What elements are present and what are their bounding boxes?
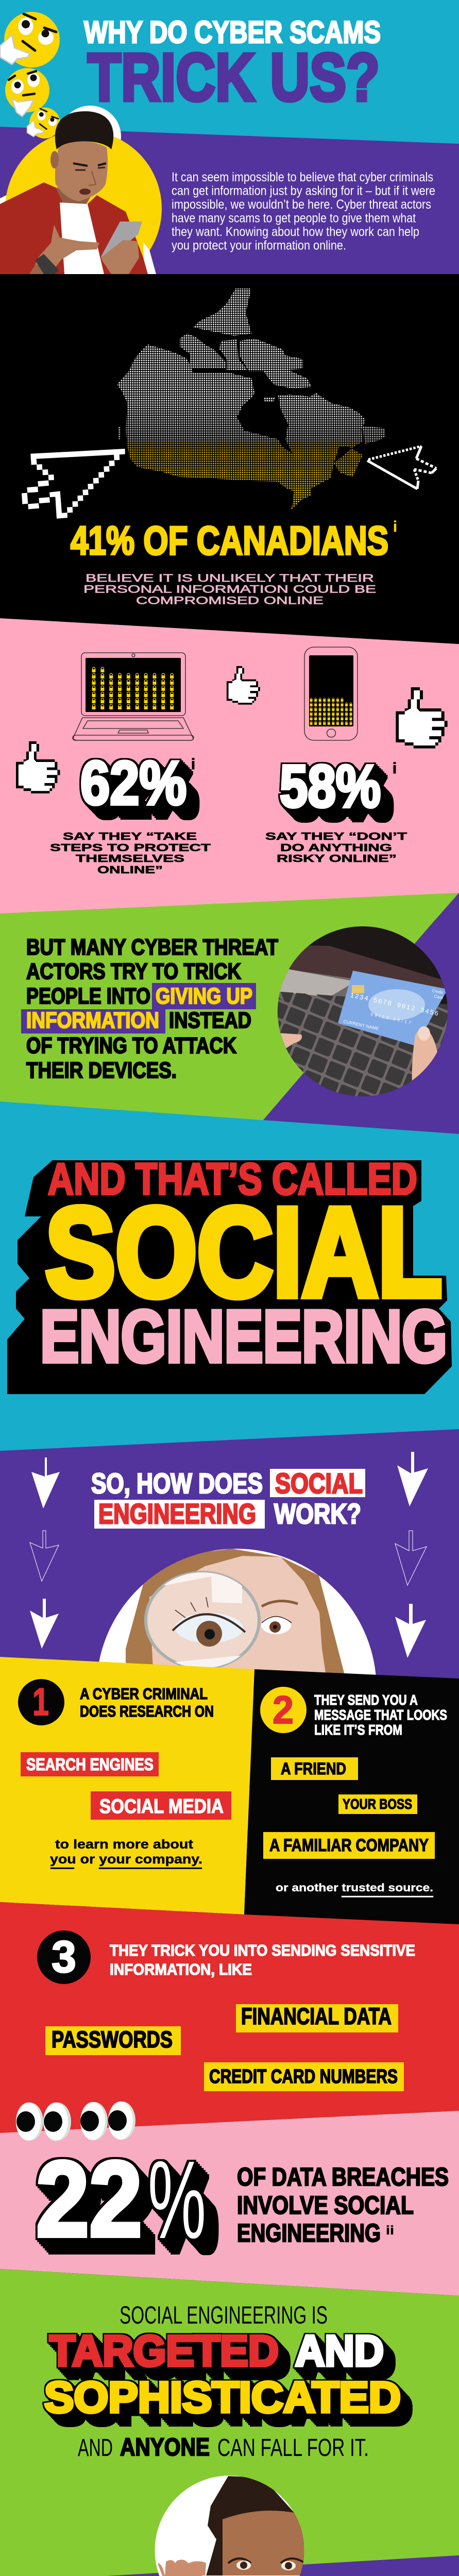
dotted map of Canada bbox=[113, 283, 392, 515]
step 1 heading bbox=[80, 1685, 214, 1720]
title: WHY DO CYBER SCAMS bbox=[84, 15, 381, 49]
text: 62% caption bbox=[50, 831, 211, 876]
photo: woman with magnifying glass bbox=[96, 1549, 377, 1829]
stat: 58%: i bbox=[393, 760, 397, 777]
step 1 badge: 1 bbox=[32, 1680, 49, 1723]
text: but many cyber threat actors: INFORMATION bbox=[26, 1008, 159, 1033]
text: of data breaches bbox=[237, 2163, 449, 2247]
icon: thumbs up left bbox=[16, 741, 60, 793]
heading: so how does social engineering work: SO, HOW DOES bbox=[91, 1467, 263, 1499]
intro paragraph: they want. Knowing about how they work can help bbox=[172, 225, 419, 239]
text: believe it is unlikely: PERSONAL INFORMATION COULD BE bbox=[83, 583, 376, 596]
tag: a friend: A FRIEND bbox=[281, 1759, 346, 1778]
stat: 22%: % bbox=[148, 2138, 206, 2262]
text: 62% caption: THEMSELVES bbox=[76, 853, 184, 865]
text: but many cyber threat actors: ACTORS TRY TO TRICK bbox=[26, 959, 241, 984]
stat: 58%: 58% bbox=[280, 753, 381, 820]
photo: credit card over keyboard: CURRENT NAME bbox=[343, 1019, 379, 1031]
background: green section bbox=[0, 893, 459, 1139]
stat: 22% bbox=[36, 2138, 206, 2262]
photo: credit card over keyboard: Credit bbox=[432, 988, 444, 995]
text: to learn more: to learn more about bbox=[55, 1837, 194, 1852]
step 1 badge bbox=[18, 1679, 64, 1725]
photo: credit card over keyboard: Card bbox=[434, 994, 443, 1001]
emoji: large thinking face bbox=[0, 12, 60, 67]
heading: so how does social engineering work bbox=[91, 1467, 365, 1530]
emoji: medium thinking face bbox=[5, 68, 49, 116]
text: and anyone can fall for it: CAN FALL FOR IT. bbox=[217, 2434, 369, 2462]
panel: green targeted and sophisticated bbox=[0, 2269, 459, 2576]
text: 58% caption: DO ANYTHING bbox=[280, 842, 392, 854]
arrow: left filled top bbox=[31, 1458, 60, 1509]
text: to learn more bbox=[50, 1837, 202, 1869]
step 2 badge: 2 bbox=[273, 1688, 294, 1732]
step 2 badge bbox=[260, 1687, 307, 1733]
tag: a familiar company: A FAMILIAR COMPANY bbox=[269, 1836, 429, 1855]
tag: your boss: YOUR BOSS bbox=[343, 1796, 412, 1812]
panel: step 3 red bbox=[0, 1902, 459, 2133]
text: and anyone can fall for it bbox=[78, 2434, 369, 2462]
photo: credit card over keyboard: 08/13 08/17 bbox=[370, 1012, 412, 1025]
tag: credit card numbers: CREDIT CARD NUMBERS bbox=[209, 2066, 398, 2088]
headline: and that's called social engineering bbox=[7, 1155, 452, 1394]
arrow: left filled bottom bbox=[30, 1599, 59, 1649]
icon: large pixel cursor bbox=[22, 449, 125, 519]
text: 62% caption: STEPS TO PROTECT bbox=[50, 842, 211, 854]
icon: small pixel cursor bbox=[367, 446, 436, 489]
icon: thumbs up centre bbox=[227, 666, 260, 705]
tag: financial data: FINANCIAL DATA bbox=[241, 2003, 392, 2029]
emoji: small thinking face bbox=[27, 108, 60, 139]
step 3 heading: INFORMATION, LIKE bbox=[110, 1960, 252, 1978]
photo: credit card over keyboard: 1234 5678 9012 3456 bbox=[349, 991, 439, 1018]
text: but many cyber threat actors: PEOPLE INTO bbox=[26, 984, 150, 1009]
panel: step 1 yellow bbox=[0, 1657, 254, 1914]
icon: laptop with locks bbox=[73, 653, 194, 740]
step 3 badge: 3 bbox=[52, 1932, 76, 1982]
text: but many cyber threat actors: THEIR DEVICES. bbox=[26, 1058, 177, 1083]
arrow: left outline bbox=[30, 1531, 59, 1581]
background: purple tips section bbox=[0, 2555, 459, 2576]
step 2 heading: LIKE IT’S FROM bbox=[314, 1722, 402, 1738]
background: purple triangle bbox=[258, 893, 459, 1139]
tag: search engines bbox=[21, 1752, 159, 1776]
stat: 41% of Canadians: i bbox=[393, 518, 397, 535]
tag: social media bbox=[91, 1791, 231, 1820]
text: to learn more: you or your company. bbox=[50, 1852, 202, 1867]
background: teal social engineering section bbox=[0, 1101, 459, 1453]
background: purple how-it-works section bbox=[0, 1429, 459, 1681]
stat: 22%: 22 bbox=[36, 2140, 142, 2259]
step 3 heading: THEY TRICK YOU INTO SENDING SENSITIVE bbox=[110, 1941, 415, 1959]
extruded black shape bbox=[7, 1160, 452, 1394]
text: of data breaches: ENGINEERING bbox=[237, 2219, 381, 2247]
title bbox=[84, 15, 381, 115]
text: believe it is unlikely bbox=[83, 572, 376, 607]
text: of data breaches: INVOLVE SOCIAL bbox=[237, 2192, 414, 2219]
text: but many cyber threat actors: GIVING UP bbox=[156, 984, 252, 1009]
text: but many cyber threat actors: OF TRYING TO ATTACK bbox=[26, 1033, 236, 1058]
text: believe it is unlikely: BELIEVE IT IS UNLIKELY THAT THEIR bbox=[86, 572, 374, 584]
photo: woman peeking over paper bbox=[155, 2476, 305, 2576]
text: another trusted source: or another trusted source. bbox=[276, 1882, 433, 1894]
text: believe it is unlikely: COMPROMISED ONLINE bbox=[136, 595, 324, 607]
icon: thumbs up right bbox=[396, 687, 448, 749]
step 3 badge bbox=[37, 1930, 91, 1984]
background: purple intro bbox=[0, 127, 459, 274]
panel: step 2 black bbox=[244, 1669, 459, 1924]
headline: targeted and: TARGETED bbox=[49, 2327, 279, 2375]
text: social engineering is: SOCIAL ENGINEERING IS bbox=[120, 2302, 328, 2329]
background: teal header bbox=[0, 0, 459, 149]
text: 58% caption: SAY THEY “DON’T bbox=[265, 831, 407, 842]
stat: 41% of Canadians: 41% OF CANADIANS bbox=[71, 518, 388, 563]
text: but many cyber threat actors: BUT MANY CYBER THREAT bbox=[26, 935, 278, 960]
intro paragraph bbox=[172, 170, 435, 252]
arrow: right outline bbox=[395, 1531, 427, 1585]
intro paragraph: you protect your information online. bbox=[172, 238, 346, 252]
panel: pink stat 22% bbox=[0, 2111, 459, 2296]
icon: phone with locks bbox=[304, 647, 358, 740]
text: but many cyber threat actors bbox=[21, 935, 278, 1083]
tag: passwords: PASSWORDS bbox=[52, 2026, 173, 2053]
headline: sophisticated: SOPHISTICATED bbox=[44, 2373, 401, 2421]
step 3 heading bbox=[110, 1941, 415, 1978]
text: 62% caption: ONLINE” bbox=[97, 864, 163, 876]
icon: googly eyes bbox=[16, 2102, 135, 2141]
text: of data breaches: ii bbox=[386, 2224, 394, 2238]
tag: your boss bbox=[338, 1794, 417, 1814]
photo: man frowning at phone bbox=[0, 106, 162, 287]
headline: targeted and: AND bbox=[295, 2327, 384, 2375]
heading: so how does social engineering work: ENGINEERING bbox=[98, 1498, 256, 1530]
tag: a familiar company bbox=[263, 1832, 435, 1859]
text: 62% caption: SAY THEY “TAKE bbox=[63, 831, 197, 842]
step 1 heading: DOES RESEARCH ON bbox=[80, 1702, 214, 1720]
title: TRICK US? bbox=[88, 39, 380, 115]
intro paragraph: have many scams to get people to give them what bbox=[172, 211, 416, 226]
tag: social media: SOCIAL MEDIA bbox=[99, 1795, 224, 1818]
heading: so how does social engineering work: WORK? bbox=[274, 1498, 361, 1530]
stat: 62%: 62% bbox=[80, 749, 186, 818]
highlight box: giving up bbox=[152, 983, 256, 1009]
step 1 heading: A CYBER CRIMINAL bbox=[80, 1685, 208, 1703]
photo: credit card over keyboard bbox=[278, 926, 453, 1097]
tag: credit card numbers bbox=[204, 2062, 404, 2091]
background: pink stats section bbox=[0, 618, 459, 917]
text: 58% caption bbox=[265, 831, 407, 865]
text: and anyone can fall for it: ANYONE bbox=[120, 2434, 210, 2461]
step 2 heading bbox=[314, 1692, 447, 1738]
arrow: right filled top bbox=[397, 1452, 428, 1506]
arrow: right filled bottom bbox=[395, 1604, 426, 1658]
stat: 62%: i bbox=[191, 756, 195, 773]
tag: search engines: SEARCH ENGINES bbox=[26, 1755, 154, 1774]
highlight box: information bbox=[21, 1009, 165, 1033]
step 2 heading: THEY SEND YOU A bbox=[314, 1692, 418, 1708]
background: black map section bbox=[0, 274, 459, 645]
heading: so how does social engineering work: SOCIAL bbox=[275, 1467, 363, 1499]
text: 58% caption: RISKY ONLINE” bbox=[277, 853, 397, 865]
text: and anyone can fall for it: AND bbox=[78, 2434, 113, 2462]
text: but many cyber threat actors: INSTEAD bbox=[169, 1008, 251, 1033]
